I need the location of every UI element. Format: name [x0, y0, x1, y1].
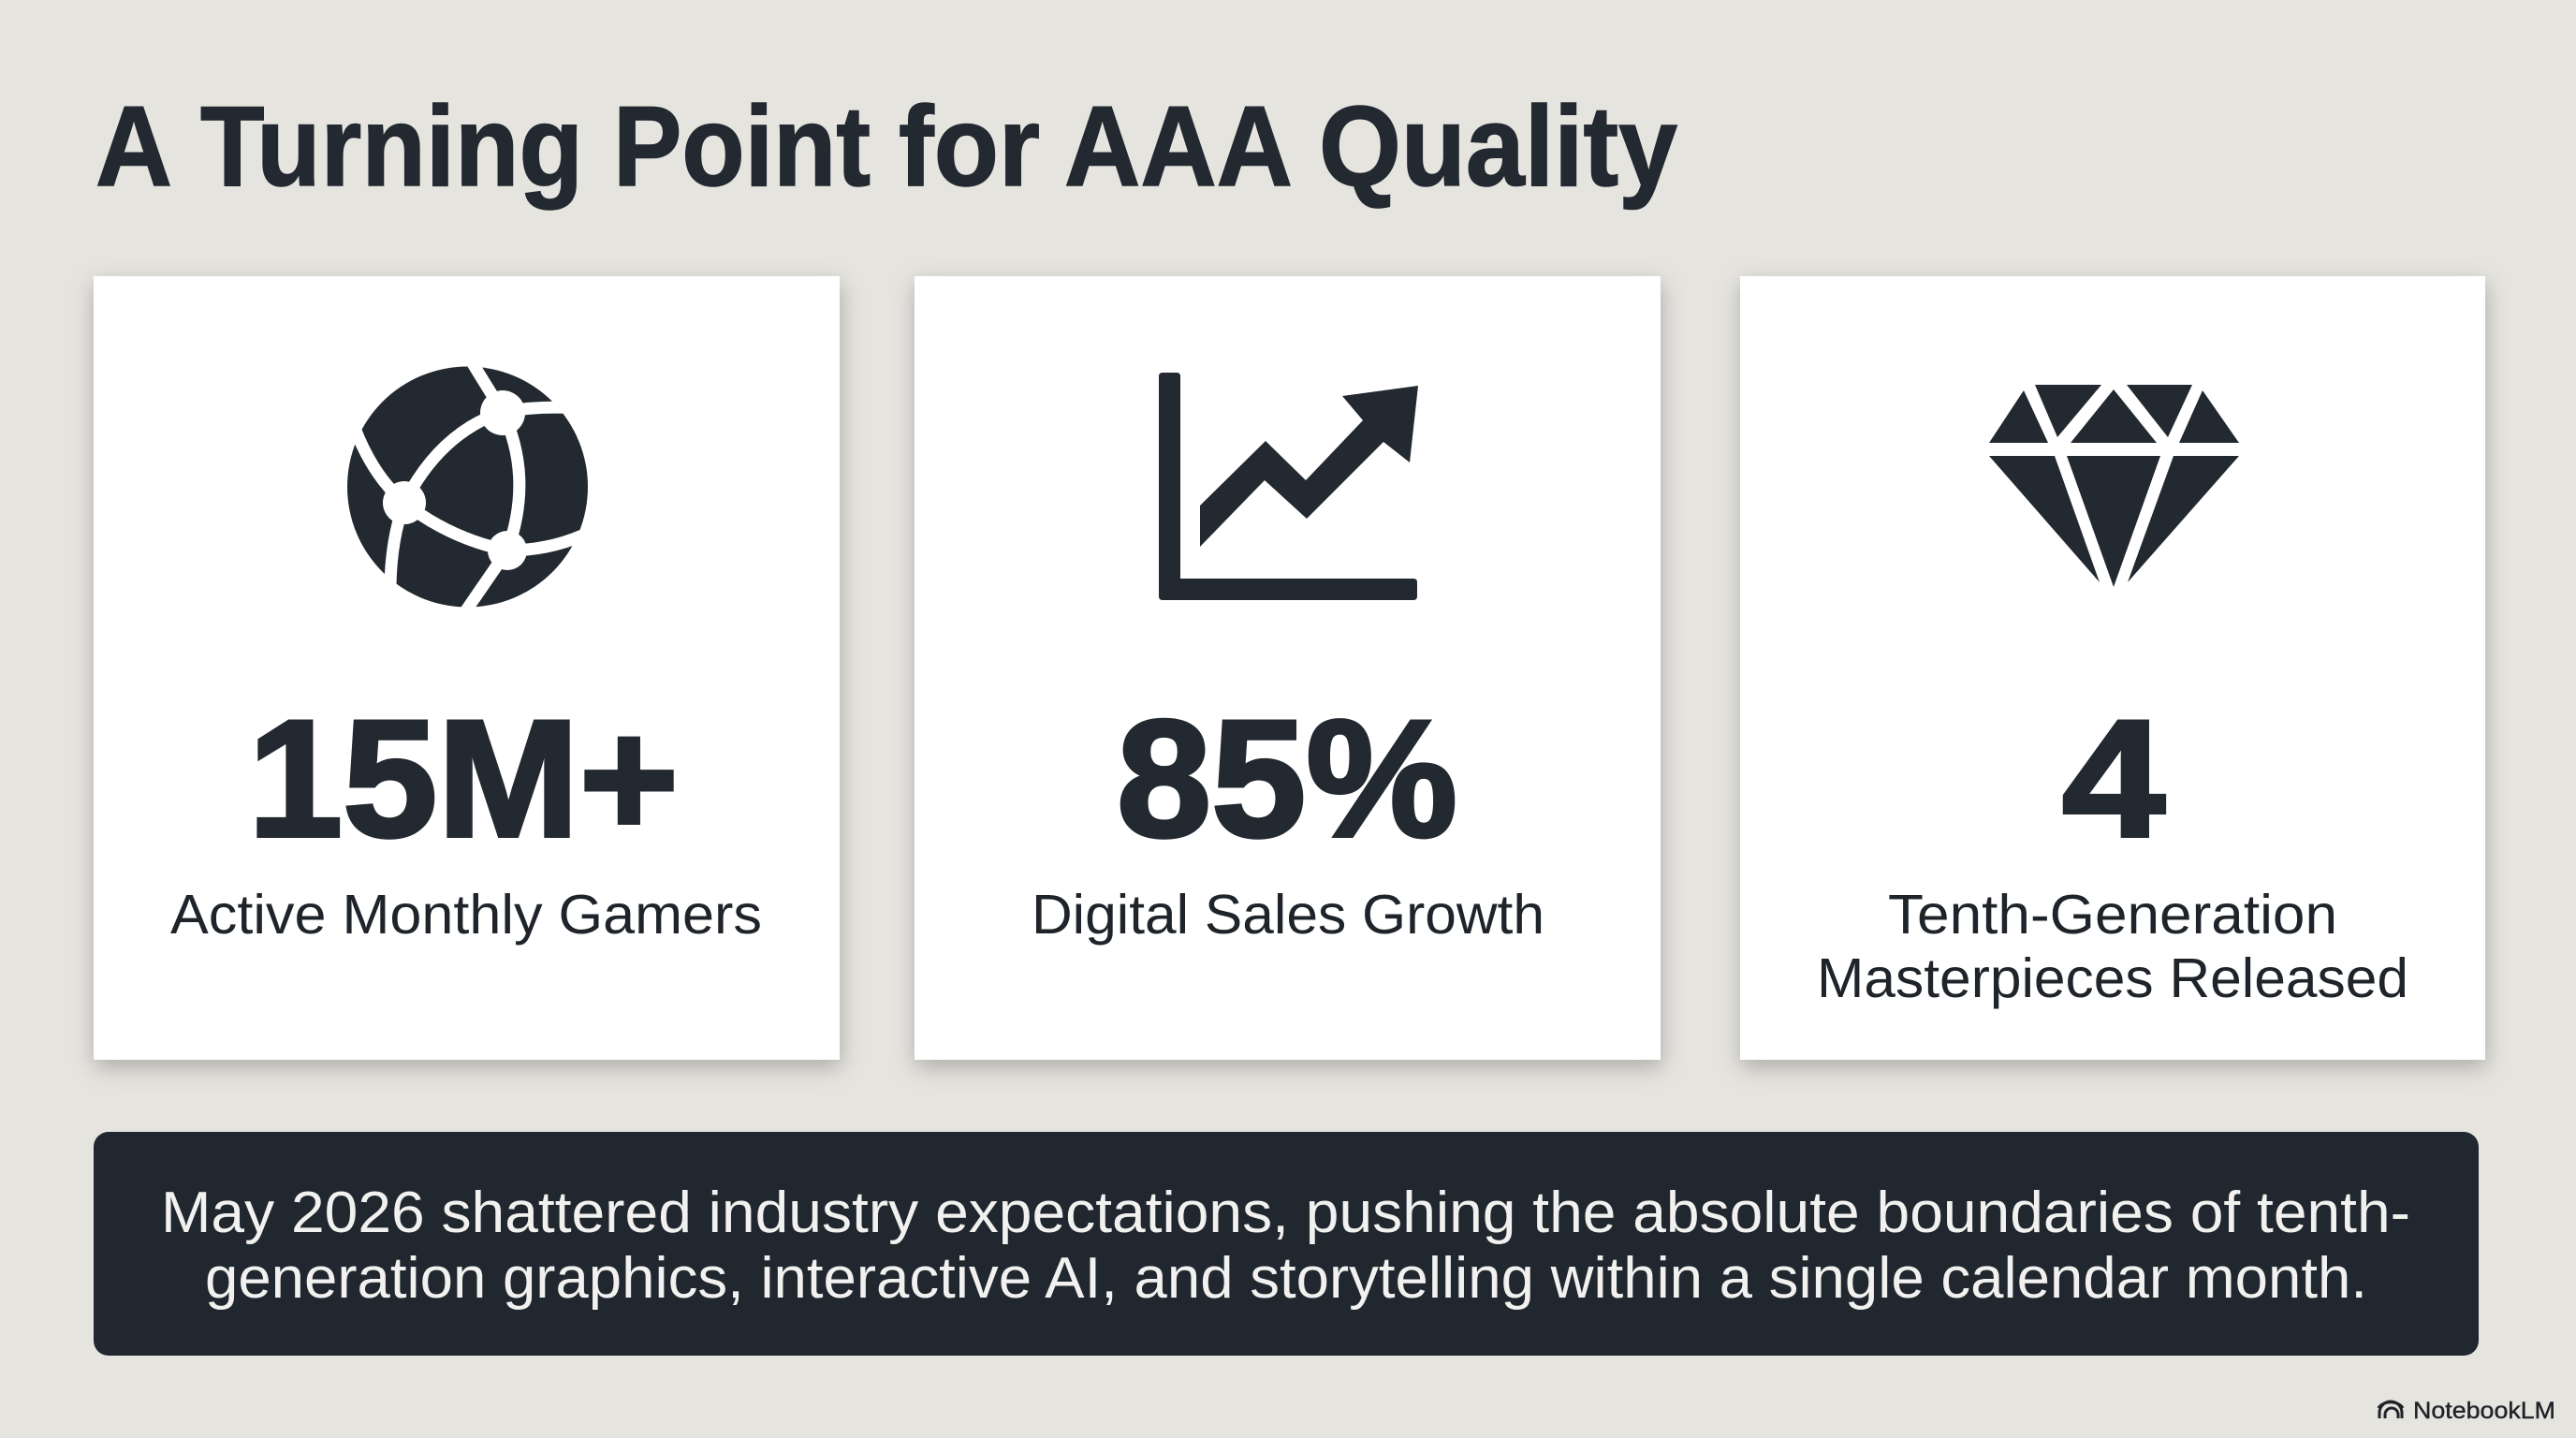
panel: digital sales growth — [915, 276, 1661, 1060]
title: Point — [613, 82, 871, 210]
statistic: 15M+: 15M+ — [248, 685, 679, 872]
title — [95, 82, 1677, 210]
title: Quality — [1319, 82, 1677, 210]
statistic: 4: 4 — [2062, 685, 2165, 872]
label: digital sales growth: Digital Sales Growth — [1032, 884, 1544, 946]
title: AAA — [1064, 82, 1293, 210]
panel: tenth-generation masterpieces — [1740, 276, 2485, 1060]
icon: diamond — [1989, 385, 2239, 587]
label: tenth-generation masterpieces released: Tenth-Generation — [1888, 884, 2337, 946]
label: tenth-generation masterpieces released: Masterpieces Released — [1817, 947, 2408, 1009]
panel: active monthly gamers — [94, 276, 840, 1060]
title: A — [95, 82, 172, 210]
label: tenth-generation masterpieces released — [1817, 884, 2408, 1009]
banner text: May 2026 shattered industry expectations, pushing the absolute boundaries of tenth- — [161, 1181, 2410, 1245]
title: for — [899, 82, 1040, 210]
icon: growth chart — [1159, 373, 1418, 600]
watermark: NotebookLM: NotebookLM — [2413, 1398, 2555, 1424]
icon: NotebookLM logo — [2378, 1401, 2403, 1418]
banner text: generation graphics, interactive AI, and storytelling within a single calendar month. — [205, 1246, 2367, 1311]
icon: globe network — [347, 360, 594, 610]
label: active monthly gamers: Active Monthly Gamers — [170, 884, 762, 946]
statistic: 85%: 85% — [1117, 685, 1457, 872]
banner text — [161, 1181, 2410, 1311]
callout banner — [94, 1132, 2479, 1356]
title: Turning — [200, 82, 583, 210]
